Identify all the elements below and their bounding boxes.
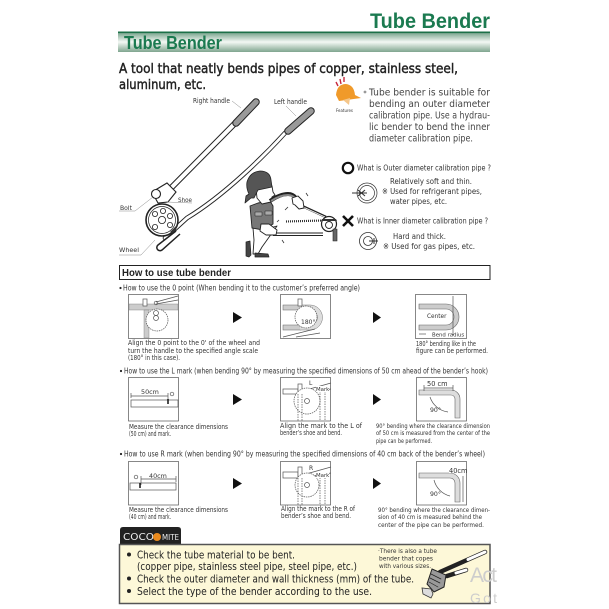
Cocomite tab: MITE <box>162 533 179 542</box>
panel: inner diameter calibration pipe: ※ Used for gas pipes, etc. <box>383 242 475 251</box>
side note <box>378 547 437 570</box>
illustration: worker bending a pipe <box>245 171 337 257</box>
step 3 diagram: 40cm <box>449 467 467 475</box>
step 1 diagram <box>128 294 178 338</box>
row: using the L mark <box>120 366 490 445</box>
step 3 diagram: Center <box>427 314 447 320</box>
section heading band <box>118 32 490 53</box>
step 1 caption: (40 cm) and mark. <box>129 513 171 521</box>
row heading: How to use the 0 point (When bending it to the customer’s preferred angle) <box>123 284 360 292</box>
panel: inner diameter calibration pipe: Hard and thick. <box>393 232 446 241</box>
right handle <box>172 102 256 187</box>
step 3 diagram: 90° <box>430 490 441 498</box>
wheel of tool <box>322 216 336 232</box>
arrow <box>373 312 381 323</box>
step 3 diagram: Bend radius <box>432 332 464 338</box>
side note: bender that copes <box>379 554 434 562</box>
icon: small tube bender <box>422 552 485 598</box>
step 3 caption: pipe can be performed. <box>376 438 432 445</box>
illustration: tube bender with labelled parts <box>119 97 311 255</box>
step 3 caption: of 50 cm is measured from the center of the <box>376 430 490 437</box>
step 2 caption <box>280 422 363 437</box>
step 2 diagram <box>280 294 330 338</box>
step 2 diagram <box>280 378 331 421</box>
legs and shoes <box>253 226 277 254</box>
how-to heading box: How to use tube bender <box>122 268 231 279</box>
step 1 caption: turn the handle to the specified angle scale <box>128 347 258 355</box>
part labels: Wheel <box>119 246 139 254</box>
step 3 diagram <box>416 378 466 421</box>
step 1 caption: (180° in this case). <box>128 354 180 362</box>
step 1 diagram <box>128 378 178 421</box>
tips list: Check the tube material to be bent. <box>137 550 295 562</box>
panel: outer diameter calibration pipe: water pipes, etc. <box>390 197 447 206</box>
Cocomite tab: COCO <box>123 532 154 543</box>
side note: ·There is also a tube <box>378 547 437 555</box>
text block: suitability note <box>364 88 490 144</box>
icon: cross mark <box>343 216 353 226</box>
row: using the R mark <box>120 450 490 529</box>
step 3 caption: figure can be performed. <box>416 347 488 355</box>
page title: Tube Bender <box>370 10 490 33</box>
row: using the 0 point <box>119 284 488 362</box>
text block: suitability note: lic bender to bend the inner <box>369 122 490 133</box>
tool rack and arms <box>286 220 323 222</box>
step 3 diagram <box>416 294 466 338</box>
step 1 caption: Measure the clearance dimensions <box>129 506 228 514</box>
text block: suitability note: diameter calibration pipe. <box>369 134 473 144</box>
step 1 caption <box>129 423 228 438</box>
wheel <box>146 204 178 236</box>
sparkle marks <box>277 193 308 243</box>
Cocomite tab <box>120 527 181 544</box>
icon: inner pipe section <box>360 232 378 250</box>
step 3 caption: 180° bending like in the <box>416 340 476 348</box>
step 1 diagram <box>128 462 178 505</box>
face <box>256 186 275 204</box>
step 1 caption: Align the 0 point to the 0' of the wheel and <box>128 339 260 347</box>
watermark: Act <box>470 564 497 587</box>
arrow <box>373 394 381 405</box>
panel: inner diameter calibration pipe <box>343 216 488 251</box>
part labels: Left handle <box>274 98 307 106</box>
text block: suitability note: bending an outer diameter <box>369 99 490 110</box>
step 2 caption: bender’s shoe and bend. <box>280 429 342 437</box>
arrow <box>233 394 242 405</box>
text block: suitability note: calibration pipe. Use a hydrau- <box>369 110 490 122</box>
arrow <box>233 312 242 323</box>
bent pipe <box>270 194 296 201</box>
step 2 caption: Align the mark to the L of <box>280 422 363 430</box>
step 2 caption: Align the mark to the R of <box>281 505 356 513</box>
step 2 diagram: Mark <box>316 387 330 393</box>
tips list: Check the outer diameter and wall thickness (mm) of the tube. <box>137 574 414 586</box>
icon: features character: Features <box>336 108 354 114</box>
panel: tips <box>120 544 490 604</box>
icon: outer pipe section <box>352 183 377 203</box>
tips list <box>127 550 414 598</box>
body <box>250 201 273 230</box>
panel: outer diameter calibration pipe: ※ Used for refrigerant pipes, <box>382 187 482 196</box>
step 1 caption <box>128 339 260 362</box>
pipe triangle <box>279 208 300 228</box>
tips list: (copper pipe, stainless steel pipe, steel pipe, etc.) <box>137 561 357 573</box>
icon: features character <box>336 77 361 114</box>
step 3 caption <box>378 506 490 529</box>
step 2 diagram <box>280 462 331 505</box>
step 1 diagram: 40cm <box>149 472 167 480</box>
left handle <box>165 111 311 238</box>
step 2 diagram: L <box>309 380 313 387</box>
arrow <box>373 478 381 489</box>
part labels: Right handle <box>193 97 230 105</box>
step 1 diagram: 50cm <box>141 388 159 396</box>
section heading band: Tube Bender <box>124 33 222 53</box>
step 2 diagram: Mark <box>316 473 330 479</box>
part labels <box>119 97 307 255</box>
headline: A tool that neatly bends pipes of copper, stainless steel, <box>119 61 458 77</box>
step 2 diagram: R <box>309 465 313 472</box>
step 1 caption: Measure the clearance dimensions <box>129 423 228 431</box>
headline: aluminum, etc. <box>119 77 206 93</box>
arrow <box>233 478 242 489</box>
step 3 diagram: 90° <box>430 406 441 414</box>
part labels: Bolt <box>120 204 132 212</box>
step 2 caption <box>281 505 356 520</box>
cap <box>245 171 272 203</box>
step 1 caption: (50 cm) and mark. <box>129 430 171 438</box>
icon: circle mark <box>343 163 353 173</box>
step 3 caption: 90° bending where the clearance dimension <box>376 422 490 430</box>
step 3 caption <box>376 422 490 445</box>
step 2 diagram: 180° <box>301 319 315 326</box>
step 3 caption: 90° bending where the clearance dimen- <box>378 506 490 514</box>
step 3 caption: center of the pipe can be performed. <box>378 522 484 529</box>
panel: outer diameter calibration pipe: What is Outer diameter calibration pipe ? <box>357 164 491 172</box>
step 3 diagram: 50 cm <box>427 380 448 388</box>
step 2 caption: bender’s shoe and bend. <box>281 512 351 520</box>
step 3 caption <box>416 340 488 355</box>
watermark: Got <box>470 590 497 606</box>
step 1 caption <box>129 506 228 521</box>
how-to heading box <box>120 266 490 280</box>
tips list: Select the type of the bender according to the use. <box>137 586 372 598</box>
headline <box>119 61 458 93</box>
step 3 diagram <box>416 462 467 505</box>
panel: outer diameter calibration pipe: Relatively soft and thin. <box>390 177 472 186</box>
hook <box>157 231 180 251</box>
watermark <box>470 564 497 606</box>
row heading: How to use R mark (when bending 90° by measuring the specified dimensions of 40 cm back of the bender’s wheel) <box>124 450 485 458</box>
shoe and bolt <box>152 183 176 203</box>
step 3 caption: sion of 40 cm is measured behind the <box>378 514 482 521</box>
panel: inner diameter calibration pipe: What is Inner diameter calibration pipe ? <box>357 216 488 226</box>
hands <box>292 196 304 209</box>
side note: with various sizes. <box>379 562 431 570</box>
row heading: How to use the L mark (when bending 90° by measuring the specified dimensions of 50 cm ahead of the bender’s hook) <box>124 366 488 376</box>
part labels: Shoe <box>178 196 192 204</box>
panel: outer diameter calibration pipe <box>343 163 491 206</box>
text block: suitability note: Tube bender is suitable for <box>368 88 490 98</box>
